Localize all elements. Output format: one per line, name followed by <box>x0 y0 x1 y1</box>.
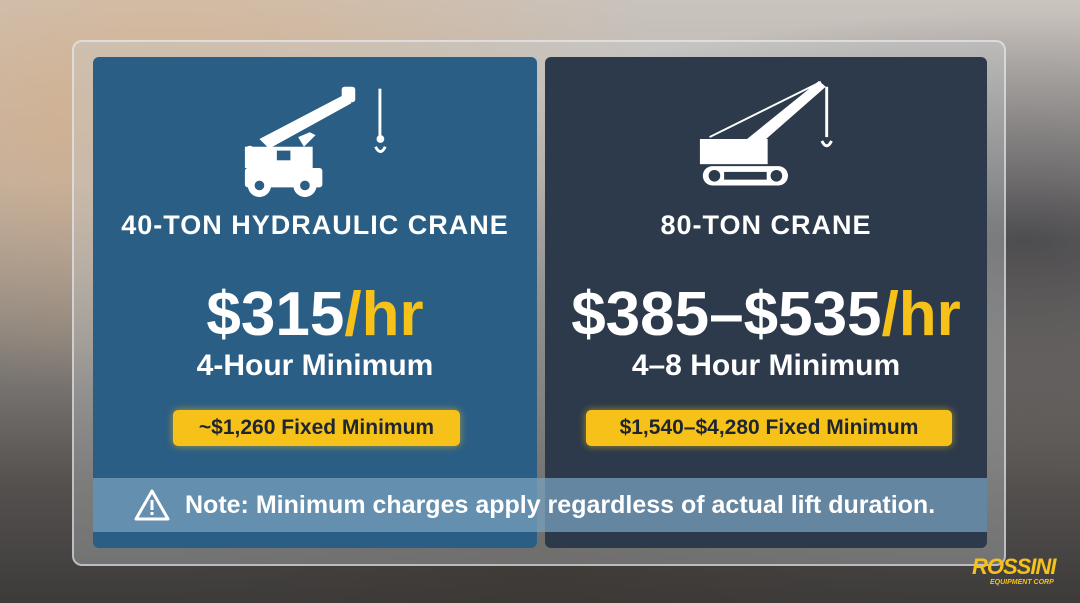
badge <box>586 410 952 446</box>
glass frame <box>72 40 1006 566</box>
icon: crawler crane <box>700 80 833 186</box>
badge: $1,540–$4,280 Fixed Minimum <box>620 416 918 439</box>
badge <box>173 410 460 446</box>
badge: ~$1,260 Fixed Minimum <box>199 416 434 439</box>
logo: ROSSINI <box>972 554 1055 579</box>
note bar: Note: Minimum charges apply regardless of actual lift duration. <box>185 491 935 519</box>
logo: EQUIPMENT CORP <box>990 579 1054 586</box>
title: 80-TON CRANE <box>660 210 872 240</box>
minimum: 4-Hour Minimum <box>197 349 433 382</box>
panel: 40-ton hydraulic crane <box>93 57 537 548</box>
title: 40-TON HYDRAULIC CRANE <box>121 210 509 240</box>
minimum: 4–8 Hour Minimum <box>632 349 900 382</box>
price: $315/hr <box>206 280 424 349</box>
icon: warning <box>134 489 170 520</box>
price: $385–$535/hr <box>571 280 961 349</box>
icon: wheeled crane <box>244 86 386 198</box>
note bar <box>93 478 987 532</box>
panel: 80-ton crane <box>545 57 987 548</box>
